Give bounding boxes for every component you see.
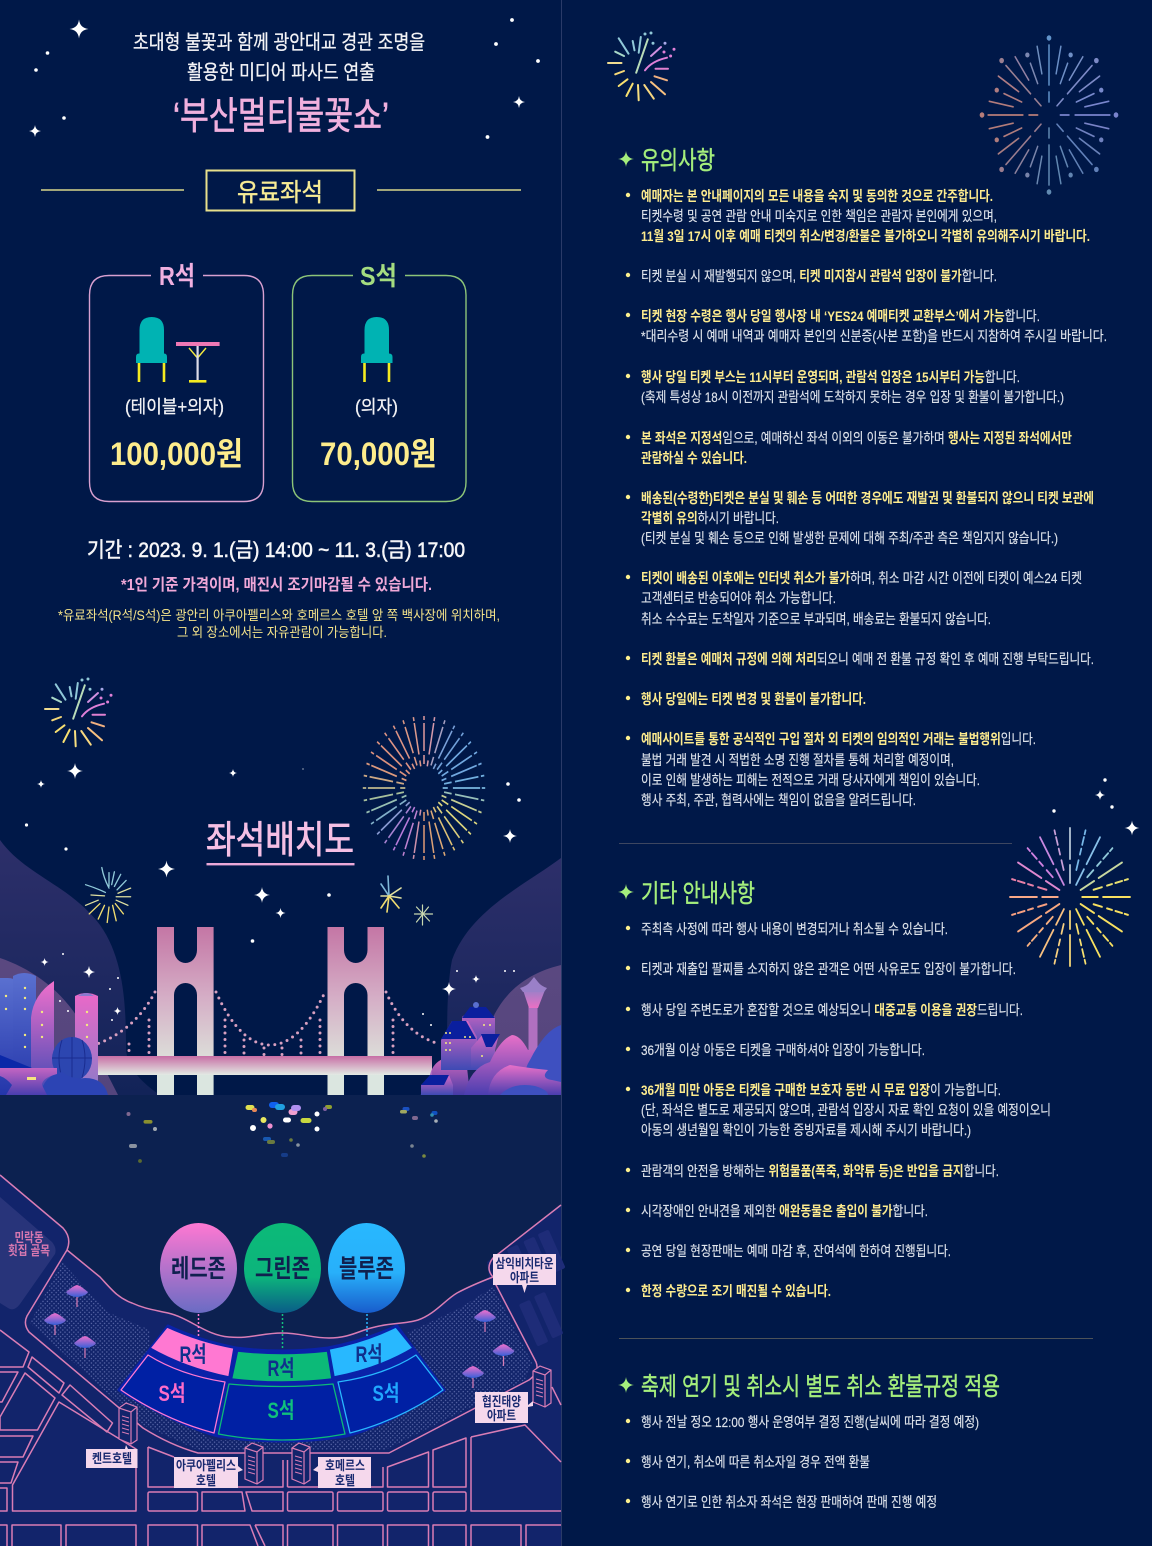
label: Homers Hotel [313,1457,371,1488]
seating fan [119,1326,444,1441]
firework: right top small [608,32,676,100]
label: Hyupjin [475,1392,533,1423]
item: refund: 행사 연기, 취소에 따른 취소자일 경우 전액 환불 [641,1454,870,1470]
heading: precautions [618,147,715,175]
seat labels: S석 [268,1398,294,1423]
sale period: 기간 : 2023. 9. 1.(금) 14:00 ~ 11. 3.(금) 17:00 [87,539,465,562]
item: illegal trade: 예매사이트를 통한 공식적인 구입 절차 외 티켓의 임의적인 거래는 불법행위입니다. [641,731,1036,747]
water [0,1095,561,1546]
label: Samik Beach Town [493,1254,556,1293]
intro text [133,31,425,84]
item: online cancel: 취소 수수료는 도착일자 기준으로 부과되며, 배송료는 환불되지 않습니다. [641,611,991,627]
label: Samik Beach Town: 아파트 [510,1270,539,1285]
heading: other information: 기타 안내사항 [641,880,755,908]
stars [25,763,521,1026]
item: illegal trade: 행사 주최, 주관, 협력사에는 책임이 없음을 알려드립니다. [641,792,916,808]
yellow note: *유료좌석(R석/S석)은 광안리 아쿠아펠리스와 호메르스 호텔 앞 쪽 백사장에 위치하며, [58,608,500,623]
heading: precautions: 유의사항 [641,147,715,175]
hotel icons [119,1366,551,1484]
land [0,1175,561,1546]
heading: other information [618,880,755,908]
item: online cancel [626,570,1082,627]
heading: paid seats [41,170,521,210]
firework: large centre [363,716,485,860]
yellow note [58,608,500,640]
card: R seat: (테이블+의자) [125,397,224,417]
label: Aquapalace Hotel: 호텔 [196,1473,216,1488]
beach dotted [30,1262,532,1450]
item: pickup [626,308,1107,344]
item: ticket storage: (티켓 분실 및 훼손 등으로 인해 발생한 문제에 대해 주최/주관 측은 책임지지 않습니다.) [641,530,1058,546]
item: refund rule: 티켓 환불은 예매처 규정에 의해 처리되오니 예매 전 환불 규정 확인 후 예매 진행 부탁드립니다. [641,651,1094,667]
item: illegal trade: 이로 인해 발생하는 피해는 전적으로 거래 당사자에게 책임이 있습니다. [641,772,980,788]
icon: chair and table [136,317,220,383]
R seat pink [150,1327,234,1377]
item: illegal trade: 불법 거래 발견 시 적법한 소명 진행 절차를 통해 처리할 예정이며, [641,752,954,768]
label: alley: 민락동 [14,1230,44,1245]
firework: small bursts [381,876,432,925]
seat labels: R석 [180,1342,206,1367]
label: Aquapalace Hotel: 아쿠아펠리스 [176,1458,236,1473]
item: agreement: 티켓수령 및 공연 관람 안내 미숙지로 인한 책임은 관람자 본인에게 있으며, [641,208,997,224]
S seat left [121,1355,225,1433]
item: children under 36 months: 36개월 미만 아동은 티켓을 구매한 보호자 동반 시 무료 입장이 가능합니다. [641,1082,1001,1098]
seat labels: R석 [356,1342,382,1367]
item: resale: 행사 연기로 인한 취소자 좌석은 현장 판매하여 판매 진행 예정 [641,1494,937,1510]
item: pickup: 티켓 현장 수령은 행사 당일 행사장 내 ‘YES24 예매티켓 교환부스’에서 가능합니다. [641,308,1040,324]
city left [0,973,108,1095]
item: assigned seats: 관람하실 수 있습니다. [641,450,747,466]
heading: seat map: 좌석배치도 [206,820,354,862]
label: alley: 횟집 골목 [8,1243,50,1258]
item: agreement [626,188,1090,244]
balloon: blue zone: 블루존 [339,1255,394,1283]
item: children under 36 months [626,1082,1051,1138]
label: Hyupjin: 협진태양 [482,1394,521,1409]
balloon: red zone: 레드존 [171,1255,226,1283]
intro text: 활용한 미디어 파사드 연출 [187,61,375,84]
firework: top left [45,678,112,746]
item: assigned seats: 본 좌석은 지정석임으로, 예매하신 좌석 이외의 이동은 불가하며 행사는 지정된 좌석에서만 [641,430,1072,446]
label: alley [8,1230,50,1258]
pink notice: *1인 기준 가격이며, 매진시 조기마감될 수 있습니다. [121,576,432,594]
item: limited quantity: 한정 수량으로 조기 매진될 수 있습니다. [641,1283,831,1299]
hills [0,840,561,1095]
item: children under 36 months: (단, 좌석은 별도로 제공되지 않으며, 관람석 입장시 자료 확인 요청이 있을 예정이오니 [641,1102,1051,1118]
balloon: green zone [244,1223,321,1313]
apartment blocks [507,1229,566,1347]
item: lost ticket: 티켓 분실 시 재발행되지 않으며, 티켓 미지참시 관람석 입장이 불가합니다. [641,268,997,284]
main title: ‘부산멀티불꽃쇼’ [173,96,389,138]
stars: right panel [1052,778,1140,836]
firework: right top large [980,35,1118,195]
item: pets: 시각장애인 안내견을 제외한 애완동물은 출입이 불가합니다. [641,1203,928,1219]
balloon: blue zone [328,1223,405,1313]
item: schedule change: 주최측 사정에 따라 행사 내용이 변경되거나 취소될 수 있습니다. [641,921,948,937]
panel: seat map illustration [0,678,566,1546]
item: dangerous goods: 관람객의 안전을 방해하는 위험물품(폭죽, 화약류 등)은 반입을 금지합니다. [641,1163,999,1179]
item: booth hours [626,369,1064,405]
dotted leader lines [198,1314,367,1352]
card: R seat: R석 [159,261,195,291]
item: decision: 행사 전날 정오 12:00 행사 운영여부 결정 진행(날씨에 따라 결정 예정) [641,1414,979,1430]
starfield top [29,18,540,139]
yellow note: 그 외 장소에서는 자유관람이 가능합니다. [177,625,387,640]
panel: precautions [618,147,1107,808]
item: ticket storage: 각별히 유의하시기 바랍니다. [641,510,779,526]
R seat blue [329,1327,413,1377]
panel: postponement policy [618,1373,1000,1510]
card: S seat [292,261,466,502]
card: S seat: S석 [360,261,397,291]
item: wristband: 티켓과 재출입 팔찌를 소지하지 않은 관객은 어떤 사유로도 입장이 불가합니다. [641,961,1016,977]
card: R seat: 100,000원 [110,436,243,472]
heading: paid seats: 유료좌석 [237,179,323,207]
panel: seating prices [29,18,540,640]
seat labels: S석 [158,1381,186,1406]
item: online cancel: 티켓이 배송된 이후에는 인터넷 취소가 불가하며, 취소 마감 시간 이전에 티켓이 예스24 티켓 [641,570,1082,586]
seat labels: S석 [372,1381,400,1406]
label: Homers Hotel: 호메르스 [325,1458,365,1473]
label: Hyupjin: 아파트 [487,1408,516,1423]
item: agreement: 예매자는 본 안내페이지의 모든 내용을 숙지 및 동의한 것으로 간주합니다. [641,188,993,204]
seat labels: R석 [268,1356,294,1381]
item: on-site sale: 공연 당일 현장판매는 예매 마감 후, 잔여석에 한하여 진행됩니다. [641,1243,951,1259]
S seat right [338,1355,443,1433]
item: booth hours: (축제 특성상 18시 이전까지 관람석에 도착하지 못하는 경우 입장 및 환불이 불가합니다.) [641,389,1064,405]
seat labels [158,1342,400,1423]
item: online cancel: 고객센터로 반송되어야 취소 가능합니다. [641,590,836,606]
item: children over 36 months: 36개월 이상 아동은 티켓을 구매하셔야 입장이 가능합니다. [641,1042,925,1058]
heading: postponement policy: 축제 연기 및 취소시 별도 취소 환불규정 적용 [641,1373,1000,1401]
label: Homers Hotel: 호텔 [335,1473,355,1488]
card: S seat: (의자) [355,397,398,417]
firework: lower left [86,867,131,923]
village and lighthouse [421,977,561,1095]
umbrellas [44,1285,514,1388]
card: R seat [90,261,264,502]
intro text: 초대형 불꽃과 함께 광안대교 경관 조명을 [133,31,425,54]
panel: other information [618,880,1051,1299]
item: ticket storage [626,490,1094,546]
item: booth hours: 행사 당일 티켓 부스는 11시부터 운영되며, 관람석 입장은 15시부터 가능합니다. [641,369,1020,385]
card: S seat: 70,000원 [320,436,437,472]
label: Samik Beach Town: 삼익비치타운 [496,1256,554,1271]
R seat green [232,1351,332,1382]
balloon: red zone [160,1223,237,1313]
reflections on water [126,1102,438,1163]
item: transit: 행사 당일 주변도로가 혼잡할 것으로 예상되오니 대중교통 이용을 권장드립니다. [641,1002,1023,1018]
bridge [97,927,432,1095]
label: Kent Hotel [86,1445,138,1468]
lighter block: raw fish alley [0,1197,56,1309]
cable lights [97,992,440,1056]
road outlines [0,1175,561,1546]
item: children under 36 months: 아동의 생년월일 확인이 가능한 증빙자료를 제시해 주시기 바랍니다.) [641,1122,971,1138]
label: Aquapalace Hotel [174,1457,243,1488]
item: event day: 행사 당일에는 티켓 변경 및 환불이 불가합니다. [641,691,866,707]
item: assigned seats [626,430,1072,466]
S seat centre [218,1384,345,1440]
item: illegal trade [626,731,1036,808]
icon: chair [361,317,392,382]
label: Kent Hotel: 켄트호텔 [92,1451,132,1466]
firework: right middle [1010,828,1130,966]
balloon: green zone: 그린존 [255,1255,310,1283]
